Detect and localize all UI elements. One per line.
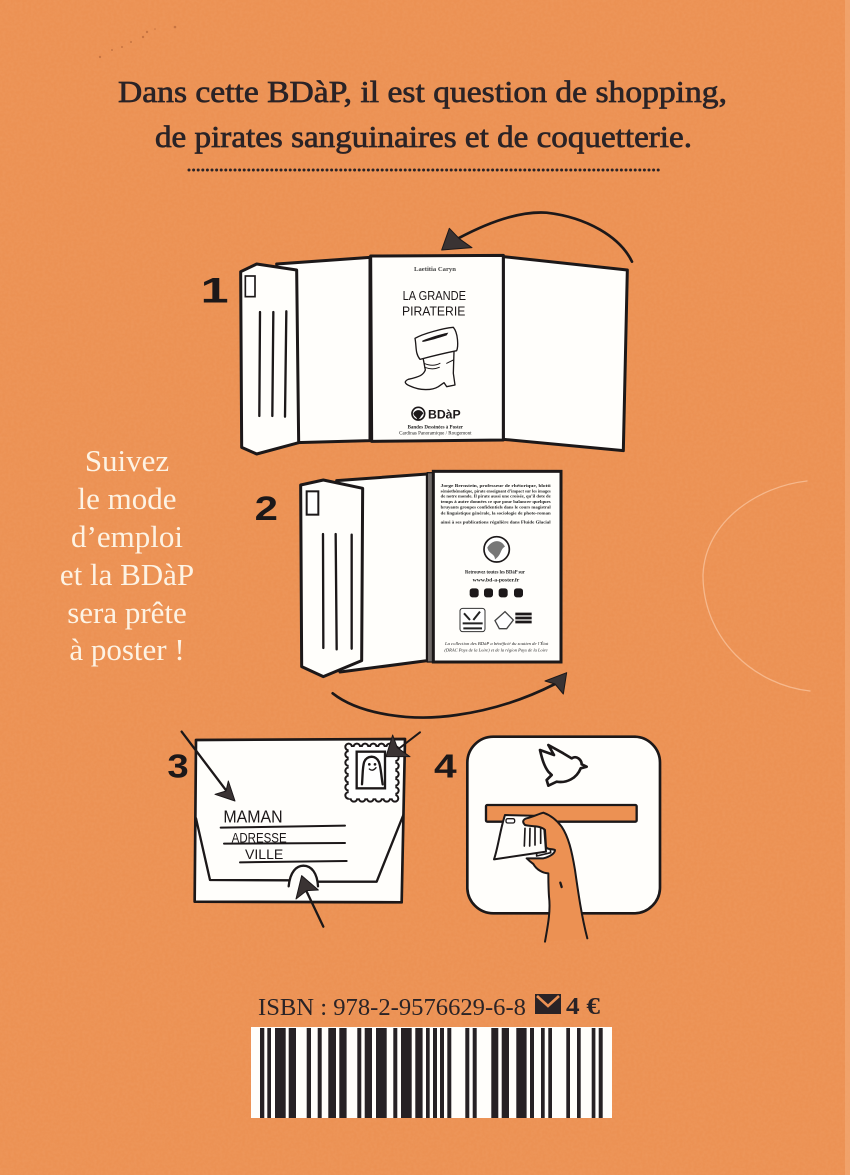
arrow to stamp bbox=[386, 732, 420, 757]
partner logos bbox=[460, 608, 532, 632]
author name: Laetitia Caryn bbox=[414, 266, 456, 273]
author biography bbox=[441, 483, 552, 524]
step number 4: 4 bbox=[434, 749, 457, 786]
boot bbox=[405, 327, 458, 390]
globe logo bbox=[484, 537, 509, 562]
folded flap bbox=[301, 480, 363, 677]
BDaP logo bbox=[412, 407, 461, 422]
folded card bbox=[494, 815, 551, 859]
ISBN line: ISBN : 978-2-9576629-6-8 bbox=[258, 995, 526, 1021]
address: ADRESSE bbox=[232, 829, 287, 845]
author biography: sémiothématique, pirate enseignant d’impact sur les images bbox=[441, 488, 551, 493]
address: VILLE bbox=[245, 846, 283, 862]
instructions text: le mode bbox=[78, 481, 176, 516]
author biography: ainsi à ses publications régulière dans Fluide Glacial bbox=[441, 519, 551, 524]
step number 3: 3 bbox=[167, 749, 189, 786]
inner panel bbox=[337, 474, 427, 672]
instructions text bbox=[60, 443, 194, 667]
spine bbox=[427, 473, 433, 662]
instructions text: à poster ! bbox=[69, 632, 185, 667]
cover title: PIRATERIE bbox=[402, 303, 465, 318]
paper crease arc bbox=[703, 481, 810, 691]
author biography: Jorge Bernstein, professeur de rhétorique, blotti bbox=[441, 483, 552, 488]
website bbox=[465, 570, 525, 584]
website: Retrouvez toutes les BDàP sur bbox=[465, 570, 525, 575]
heading: de pirates sanguinaires et de coquetterie. bbox=[155, 119, 692, 154]
instructions text: Suivez bbox=[85, 443, 169, 478]
author biography: de linguistique générale, la sociologie de photo-roman bbox=[441, 510, 551, 515]
credits bbox=[444, 641, 549, 652]
hand bbox=[523, 813, 587, 942]
heading bbox=[118, 74, 727, 154]
author biography: bruyants groupes confidentiels dans le cours magistral bbox=[441, 505, 551, 510]
cover small print: Bandes Dessinées à Poster bbox=[408, 425, 464, 430]
cover title: LA GRANDE bbox=[403, 288, 466, 303]
envelope flap bbox=[196, 815, 403, 882]
price: 4 € bbox=[566, 994, 600, 1020]
step 1 illustration bbox=[201, 212, 632, 454]
arrow to notch bbox=[296, 876, 323, 927]
author biography: de notre monde. Il pirate aussi une croisée, qu’il dote de bbox=[441, 494, 551, 499]
instructions text: sera prête bbox=[67, 595, 187, 630]
inner left panel bbox=[277, 257, 370, 443]
centre cover page bbox=[371, 255, 503, 441]
icon: envelope bbox=[535, 994, 561, 1014]
step 4 illustration bbox=[434, 737, 660, 913]
stamp bbox=[349, 747, 395, 798]
envelope notch bbox=[289, 866, 318, 886]
step number 2: 2 bbox=[255, 490, 278, 528]
arrow bbox=[442, 212, 632, 262]
arrow to address bbox=[182, 732, 235, 801]
address bbox=[221, 806, 347, 862]
step 2 illustration bbox=[255, 471, 567, 717]
cover small print: Cardinas Panoramique / Rougemont bbox=[399, 432, 472, 437]
barcode bbox=[251, 1027, 612, 1118]
cover title bbox=[402, 288, 466, 318]
credits: (DRAC Pays de la Loire) et de la région Pays de la Loire bbox=[444, 647, 548, 652]
heading: Dans cette BDàP, il est question de shopping, bbox=[118, 74, 727, 109]
arrow bbox=[333, 673, 567, 717]
address: MAMAN bbox=[223, 806, 283, 826]
BDaP logo: BDàP bbox=[428, 408, 461, 422]
folded flap bbox=[241, 264, 299, 454]
mailbox bbox=[467, 737, 660, 913]
envelope bbox=[195, 739, 405, 902]
cover small print bbox=[399, 425, 472, 437]
mail slot bbox=[486, 805, 637, 822]
social icons bbox=[470, 588, 523, 597]
back page bbox=[433, 471, 561, 662]
right panel bbox=[503, 257, 627, 451]
credits: La collection des BDàP a bénéficié du soutien de l’État bbox=[444, 641, 549, 646]
instructions text: et la BDàP bbox=[60, 557, 194, 592]
author biography: temps à autre données ce que pour balancer quelques bbox=[441, 499, 551, 504]
icon: bird bbox=[540, 745, 587, 786]
step number 1: 1 bbox=[201, 272, 229, 311]
step 3 illustration bbox=[167, 732, 420, 927]
website: www.bd-a-poster.fr bbox=[473, 578, 520, 584]
card and hand bbox=[494, 813, 587, 942]
instructions text: d’emploi bbox=[71, 519, 183, 554]
